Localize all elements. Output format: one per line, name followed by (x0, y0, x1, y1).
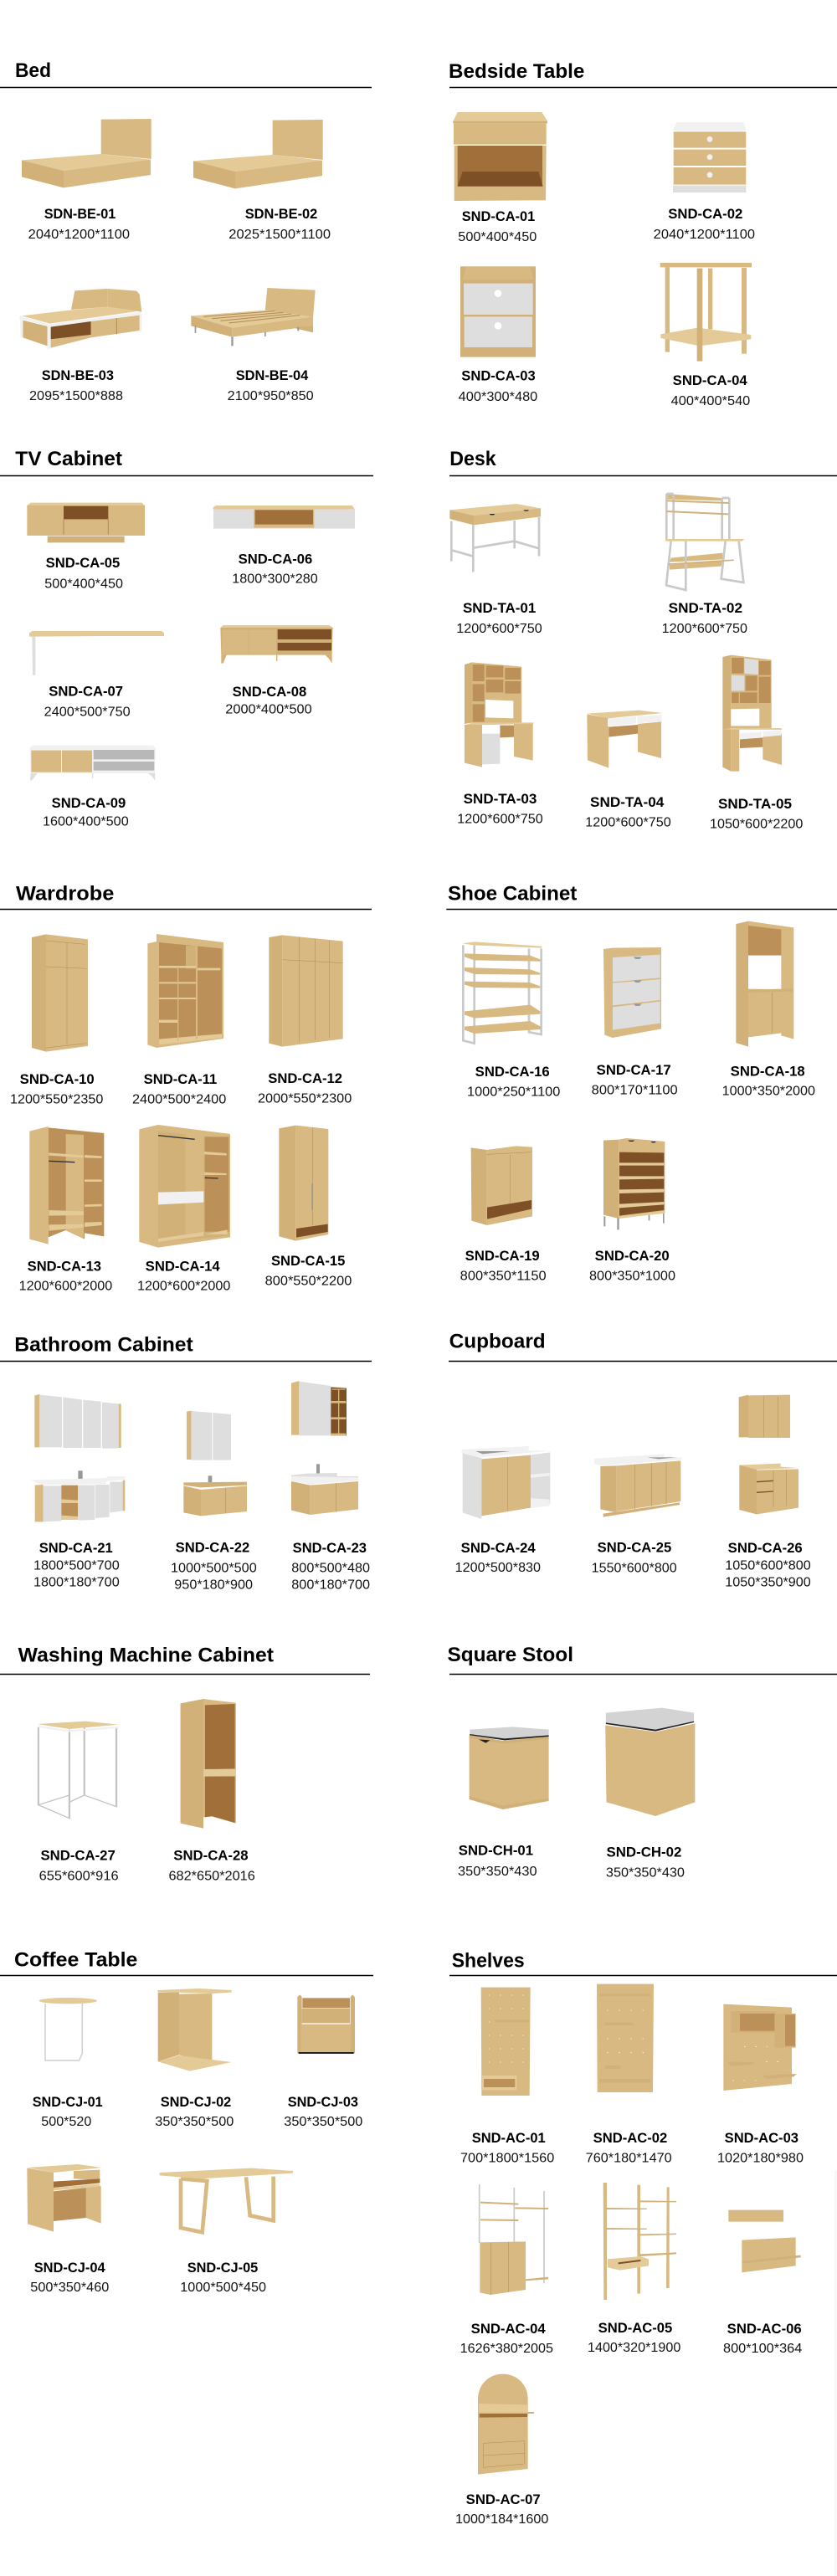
item: SND-CA-22 (171, 1411, 257, 1593)
icon: wardrobe with white drawers (139, 1125, 230, 1248)
item: SND-CA-22: 1000*500*500 (171, 1562, 257, 1576)
item: SND-CA-18 (722, 921, 815, 1099)
item: SDN-BE-04: 2100*950*850 (228, 389, 314, 403)
panel: Coffee Table (0, 1949, 373, 2295)
item: SND-CH-01 (458, 1727, 549, 1879)
item: SND-AC-01: 700*1800*1560 (460, 2151, 554, 2165)
heading: Bedside Table: Bedside Table (449, 60, 584, 83)
item: SND-CA-07: 2400*500*750 (44, 706, 131, 720)
item: SND-CA-13 (19, 1126, 112, 1294)
item: SND-CA-21 (31, 1394, 125, 1590)
item: SND-CA-18: 1000*350*2000 (722, 1085, 815, 1099)
item: SND-AC-05: SND-AC-05 (598, 2321, 672, 2336)
item: SDN-BE-01: SDN-BE-01 (44, 207, 116, 222)
item: SND-CA-22: 950*180*900 (174, 1578, 253, 1593)
panel: Washing Machine Cabinet (0, 1644, 370, 1884)
icon: open side table (27, 2164, 102, 2232)
item: SND-CA-09: SND-CA-09 (52, 796, 126, 811)
item: SND-CA-13: 1200*600*2000 (19, 1280, 112, 1294)
icon: pegboard with two shelves (597, 1984, 654, 2092)
item: SND-CJ-03: SND-CJ-03 (288, 2095, 358, 2110)
item: SDN-BE-03 (19, 289, 141, 403)
heading: Coffee Table: Coffee Table (14, 1949, 137, 1972)
icon: pegboard with shelf and box (481, 1988, 531, 2096)
item: SND-CA-02: SND-CA-02 (668, 207, 742, 222)
item: SND-CJ-02 (155, 1988, 234, 2129)
icon: desk with metal frame hutch (665, 494, 744, 590)
item: SND-CA-26: 1050*350*900 (725, 1576, 811, 1590)
item: SND-CA-13: SND-CA-13 (28, 1259, 101, 1274)
item: SND-CJ-01: SND-CJ-01 (33, 2095, 103, 2110)
item: SND-CA-21: 1800*180*700 (33, 1576, 120, 1590)
item: SND-TA-03: 1200*600*750 (457, 813, 543, 827)
item: SND-TA-04: 1200*600*750 (585, 816, 671, 830)
item: SND-CA-14: SND-CA-14 (146, 1259, 221, 1274)
item: SND-CA-16 (462, 942, 560, 1100)
icon: long kitchen cabinet (594, 1454, 682, 1517)
item: SND-CA-21: 1800*500*700 (33, 1559, 120, 1573)
item: SND-TA-02 (662, 494, 747, 636)
item: SND-CA-02: 2040*1200*1100 (654, 228, 755, 242)
icon: two wall panels (728, 2210, 801, 2272)
panel: Square Stool (447, 1644, 837, 1881)
item: SND-CA-11: SND-CA-11 (144, 1072, 217, 1087)
icon: two door shoe cabinet (471, 1146, 532, 1225)
item: SND-CA-27 (38, 1722, 119, 1884)
item: SND-AC-05: 1400*320*1900 (588, 2341, 680, 2355)
item: SND-AC-03: 1020*180*980 (717, 2151, 804, 2165)
item: SND-CA-09 (30, 746, 156, 829)
icon: tall desk with hutch (722, 655, 782, 772)
item: SND-CJ-01: 500*520 (41, 2115, 91, 2129)
icon: white frame TV cabinet (30, 746, 156, 781)
item: SND-AC-03: SND-AC-03 (725, 2131, 798, 2146)
item: SDN-BE-03: SDN-BE-03 (42, 368, 114, 383)
item: SND-CA-06: 1800*300*280 (232, 572, 318, 587)
item: SND-CH-02 (605, 1708, 695, 1881)
icon: bed with headboard (193, 120, 323, 188)
item: SND-AC-07 (455, 2374, 548, 2527)
item: SND-CA-27: 655*600*916 (39, 1870, 119, 1884)
item: SND-CA-23 (291, 1381, 370, 1593)
icon: desk with bookcase hutch (465, 662, 533, 767)
item: SND-CJ-04: 500*350*460 (30, 2281, 109, 2295)
item: SND-CA-25: SND-CA-25 (598, 1540, 671, 1555)
item: SND-CA-26: SND-CA-26 (728, 1541, 803, 1556)
icon: two drawer bedside table (460, 266, 536, 357)
item: SND-CA-27: SND-CA-27 (40, 1849, 116, 1864)
heading: Washing Machine Cabinet: Washing Machine Cabinet (18, 1644, 274, 1666)
item: SND-CA-15: SND-CA-15 (271, 1254, 345, 1269)
item: SND-CA-20 (589, 1138, 675, 1283)
item: SND-TA-05: 1050*600*2200 (710, 818, 803, 832)
item: SND-CJ-03: 350*350*500 (284, 2115, 362, 2129)
item: SND-CA-17: SND-CA-17 (597, 1063, 671, 1078)
item: SND-CA-11: 2400*500*2400 (132, 1093, 226, 1107)
item: SND-TA-04 (585, 711, 671, 830)
heading: Bed: Bed (15, 59, 51, 82)
icon: slatted bed (191, 288, 316, 346)
item: SND-CJ-05 (160, 2168, 293, 2295)
item: SND-CA-22: SND-CA-22 (176, 1540, 249, 1555)
icon: three drawer cabinet (673, 122, 747, 192)
panel: Shoe Cabinet (446, 882, 837, 1283)
item: SND-CA-04: SND-CA-04 (673, 373, 748, 388)
icon: magazine rack (297, 1994, 355, 2054)
item: SND-CA-10 (10, 934, 103, 1107)
item: SND-CA-03 (459, 266, 537, 404)
item: SND-AC-02: SND-AC-02 (593, 2131, 667, 2146)
item: SND-CA-03: 400*300*480 (459, 390, 537, 404)
icon: bedside table with open shelf (453, 112, 547, 201)
item: SND-CA-18: SND-CA-18 (731, 1064, 805, 1079)
icon: kitchen cabinet with sink (462, 1446, 552, 1519)
heading: Desk: Desk (449, 448, 496, 470)
panel: Wardrobe (0, 882, 372, 1294)
icon: wall system with cabinet (480, 2184, 548, 2295)
icon: wall shelf with one leg (29, 631, 164, 675)
icon: round side table (39, 1998, 97, 2060)
item: SND-CJ-05: 1000*500*450 (180, 2281, 266, 2295)
item: SND-CA-26: 1050*600*800 (725, 1559, 811, 1573)
item: SND-CA-21: SND-CA-21 (39, 1541, 113, 1556)
icon: floating white TV cabinet (213, 505, 355, 529)
item: SND-CA-15: 800*550*2200 (265, 1275, 352, 1289)
item: SND-AC-05 (588, 2183, 680, 2355)
icon: storage stool with cushion (470, 1727, 549, 1809)
item: SND-CH-02: 350*350*430 (606, 1866, 685, 1881)
item: SND-CA-19: 800*350*1150 (460, 1269, 547, 1283)
item: SND-AC-03 (717, 2004, 804, 2165)
item: SND-TA-03: SND-TA-03 (464, 792, 537, 807)
heading: Square Stool: Square Stool (447, 1644, 573, 1666)
icon: wide mirror cabinet and vanity (31, 1394, 125, 1521)
item: SND-CA-17: 800*170*1100 (592, 1084, 678, 1098)
icon: bed with headboard (22, 119, 151, 187)
item: SND-CA-23: 800*500*480 (291, 1562, 370, 1576)
item: SND-TA-02: 1200*600*750 (662, 622, 747, 636)
panel: Bathroom Cabinet (0, 1333, 372, 1593)
item: SND-TA-02: SND-TA-02 (669, 601, 742, 616)
icon: narrow wardrobe (279, 1126, 328, 1241)
item: SND-CA-17 (592, 947, 678, 1098)
item: SDN-BE-02 (193, 120, 331, 242)
item: SND-CA-24 (455, 1446, 552, 1575)
item: SND-CA-02 (654, 122, 755, 242)
icon: open shelving unit (29, 1126, 104, 1244)
item: SND-AC-06: 800*100*364 (723, 2342, 802, 2356)
item: SDN-BE-03: 2095*1500*888 (29, 389, 123, 403)
item: SND-CA-07: SND-CA-07 (49, 685, 123, 700)
icon: metal shoe rack (462, 942, 542, 1044)
item: SND-AC-04 (460, 2184, 553, 2356)
item: SND-CA-24: 1200*500*830 (455, 1561, 541, 1575)
icon: two tier side table (660, 263, 752, 362)
item: SND-CJ-04 (27, 2164, 109, 2295)
item: SND-CA-28: SND-CA-28 (173, 1849, 249, 1864)
heading: Shoe Cabinet: Shoe Cabinet (448, 882, 577, 905)
item: SND-CA-07 (29, 631, 164, 720)
icon: open shoe rack with drawers (603, 1138, 665, 1229)
icon: upper and lower kitchen cabinets (739, 1390, 798, 1514)
item: SND-CA-19 (460, 1146, 547, 1283)
heading: Bathroom Cabinet: Bathroom Cabinet (14, 1333, 193, 1356)
item: SND-TA-03 (457, 662, 543, 827)
item: SND-TA-01 (449, 504, 542, 636)
icon: TV cabinet with doors and shelves (220, 625, 333, 664)
icon: two door wardrobe (32, 934, 88, 1052)
heading: Wardrobe: Wardrobe (16, 882, 114, 905)
item: SND-TA-01: 1200*600*750 (456, 622, 542, 636)
icon: coffee table with trapezoid legs (160, 2168, 293, 2232)
item: SND-CA-12 (258, 935, 352, 1106)
item: SND-CA-14: 1200*600*2000 (137, 1280, 230, 1294)
panel: TV Cabinet (0, 448, 373, 829)
item: SND-CA-01: 500*400*450 (458, 230, 537, 244)
item: SND-CJ-01 (33, 1998, 103, 2129)
item: SND-CJ-02: 350*350*500 (155, 2115, 234, 2129)
icon: metal frame stand (38, 1722, 119, 1819)
item: SND-CA-19: SND-CA-19 (465, 1249, 540, 1264)
icon: desk with metal legs (449, 504, 541, 572)
item: SDN-BE-04: SDN-BE-04 (236, 368, 309, 383)
item: SND-CA-05: SND-CA-05 (46, 556, 120, 571)
panel: Shelves (449, 1950, 837, 2527)
item: SND-CA-14 (137, 1125, 230, 1294)
heading: Cupboard: Cupboard (449, 1331, 546, 1353)
item: SND-AC-01 (460, 1988, 554, 2165)
item: SND-CA-04: 400*400*540 (671, 394, 750, 408)
item: SND-CA-03: SND-CA-03 (461, 369, 536, 384)
icon: mirror with shelves and vanity (291, 1381, 358, 1515)
item: SND-CA-11 (132, 934, 226, 1107)
item: SND-TA-04: SND-TA-04 (590, 795, 665, 810)
item: SND-CA-23: 800*180*700 (291, 1578, 370, 1593)
item: SND-CJ-05: SND-CJ-05 (187, 2260, 258, 2276)
item: SDN-BE-04 (191, 288, 316, 403)
panel: Bed (0, 59, 372, 403)
item: SND-CA-25 (592, 1454, 682, 1576)
item: SND-CA-20: SND-CA-20 (595, 1249, 670, 1264)
item: SND-AC-04: 1626*380*2005 (460, 2342, 553, 2356)
heading: TV Cabinet: TV Cabinet (15, 448, 122, 470)
item: SND-AC-02 (586, 1984, 672, 2165)
panel: Bedside Table (449, 60, 837, 408)
panel: Cupboard (449, 1331, 837, 1590)
item: SND-CH-01: SND-CH-01 (459, 1844, 533, 1859)
item: SND-CA-28 (169, 1699, 255, 1884)
item: SND-AC-06 (723, 2210, 802, 2356)
icon: TV cabinet with centre niche (27, 503, 145, 542)
item: SND-AC-06: SND-AC-06 (727, 2322, 802, 2337)
item: SND-CA-12: 2000*550*2300 (258, 1092, 352, 1106)
item: SND-CA-06: SND-CA-06 (239, 552, 312, 567)
item: SDN-BE-02: 2025*1500*1100 (229, 228, 331, 242)
icon: C-shaped side table (157, 1988, 232, 2071)
icon: mirror cabinet and wood vanity (183, 1411, 247, 1516)
heading: Shelves: Shelves (452, 1950, 525, 1973)
item: SND-TA-05 (710, 655, 803, 832)
item: SND-CA-01: SND-CA-01 (462, 209, 535, 224)
item: SND-TA-05: SND-TA-05 (718, 797, 792, 812)
item: SDN-BE-02: SDN-BE-02 (245, 207, 317, 222)
item: SND-CA-10: SND-CA-10 (20, 1072, 95, 1087)
icon: open wardrobe with shelves (147, 934, 223, 1048)
item: SND-CA-23: SND-CA-23 (293, 1541, 367, 1556)
icon: four door wardrobe (269, 935, 343, 1047)
item: SND-CH-01: 350*350*430 (458, 1865, 537, 1879)
item: SND-CA-26 (725, 1390, 811, 1590)
item: SND-CA-09: 1600*400*500 (43, 815, 129, 829)
item: SND-CA-05 (27, 503, 145, 592)
icon: pegboard with boxes (723, 2004, 797, 2091)
item: SND-CA-25: 1550*600*800 (592, 1562, 677, 1576)
item: SDN-BE-01: 2040*1200*1100 (28, 228, 130, 242)
item: SND-CA-12: SND-CA-12 (268, 1071, 342, 1086)
item: SND-CA-28: 682*650*2016 (169, 1870, 255, 1884)
icon: simple desk with white drawers (587, 711, 663, 768)
item: SND-CH-02: SND-CH-02 (606, 1845, 681, 1860)
item: SND-CA-10: 1200*550*2350 (10, 1093, 103, 1107)
item: SND-CA-16: 1000*250*1100 (467, 1085, 560, 1100)
item: SND-AC-07: SND-AC-07 (466, 2492, 541, 2507)
item: SND-CA-24: SND-CA-24 (461, 1541, 537, 1556)
icon: tall washing machine cabinet (181, 1699, 236, 1829)
item: SDN-BE-01 (22, 119, 151, 242)
item: SND-CA-06 (213, 505, 355, 587)
item: SND-AC-04: SND-AC-04 (471, 2322, 547, 2337)
icon: tall stool with cushion (605, 1708, 695, 1816)
item: SND-CA-16: SND-CA-16 (475, 1065, 550, 1080)
icon: hallway cabinet (736, 921, 793, 1047)
item: SND-CJ-02: SND-CJ-02 (161, 2095, 231, 2110)
item: SND-CA-04 (660, 263, 752, 408)
icon: arched wall panel (478, 2374, 534, 2475)
item: SND-CJ-04: SND-CJ-04 (34, 2260, 106, 2276)
item: SND-CA-08: SND-CA-08 (233, 685, 306, 700)
panel: Desk (449, 448, 837, 832)
icon: wall system with wooden rails (603, 2183, 676, 2300)
item: SND-TA-01: SND-TA-01 (463, 601, 536, 616)
item: SND-AC-07: 1000*184*1600 (455, 2512, 548, 2527)
item: SND-CJ-03 (284, 1994, 362, 2129)
icon: flip door shoe cabinet (603, 947, 661, 1038)
item: SND-CA-20: 800*350*1000 (589, 1269, 675, 1283)
item: SND-CA-08 (220, 625, 333, 717)
item: SND-AC-02: 760*180*1470 (586, 2151, 672, 2165)
item: SND-CA-05: 500*400*450 (44, 577, 123, 592)
icon: storage bed (19, 289, 141, 349)
item: SND-CA-08: 2000*400*500 (225, 703, 312, 717)
item: SND-CA-01 (453, 112, 547, 244)
item: SND-AC-01: SND-AC-01 (472, 2131, 546, 2146)
item: SND-CA-15 (265, 1126, 352, 1289)
